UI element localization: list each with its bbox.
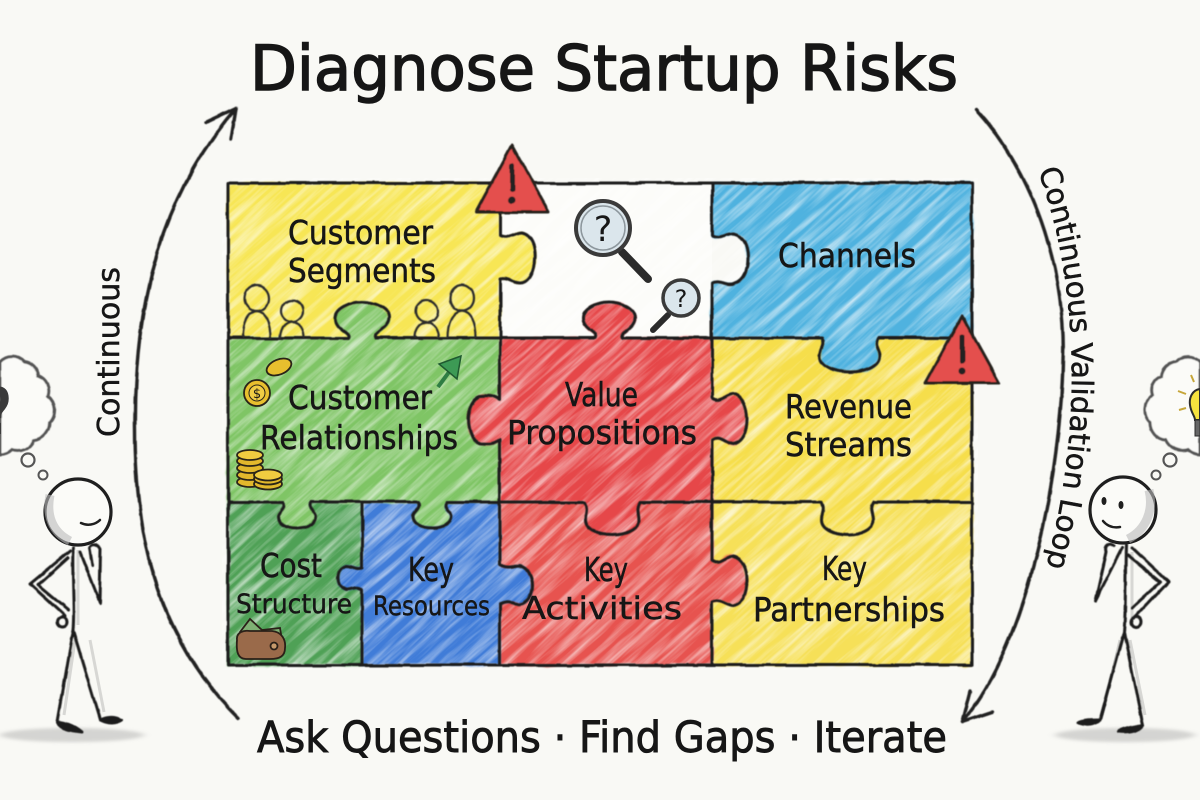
label: key partnerships: Key [822, 549, 867, 588]
panel: key resources fill [338, 502, 532, 665]
icon: left thinking figure [0, 479, 144, 742]
footer text: Ask Questions · Find Gaps · Iterate [257, 713, 947, 763]
icon: right thinking figure [1055, 477, 1195, 742]
label: key activities [522, 550, 682, 627]
panel: channels fill [712, 183, 972, 372]
label: continuous validation loop: Continuous Validation Loop [1040, 168, 1094, 568]
panel: key partnerships fill [712, 502, 972, 665]
label: customer segments: Segments [288, 251, 436, 290]
icon: warning triangle top [476, 145, 549, 212]
label: channels: Channels [778, 236, 916, 275]
title: Diagnose Startup Risks [250, 32, 958, 105]
panel: customer relationships fill [228, 302, 500, 528]
icon: large magnifier: ? [594, 210, 612, 250]
icon: large magnifier [576, 201, 648, 279]
label: customer relationships: Relationships [260, 418, 458, 457]
icon: growth arrow [438, 356, 461, 387]
icon: warning triangle right [925, 316, 999, 383]
label: cost structure: Structure [236, 589, 352, 620]
panel: customer segments fill [228, 183, 535, 338]
panel: key activities fill [500, 502, 747, 665]
label: key activities: Activities [522, 591, 682, 627]
panel: value propositions fill [468, 302, 747, 535]
label: value propositions: Propositions [507, 413, 697, 452]
arrow: left loop [135, 108, 238, 718]
label: continuous left: Continuous [92, 267, 127, 437]
label: key partnerships: Partnerships [753, 590, 945, 629]
label: customer relationships [260, 378, 458, 457]
panel: revenue streams fill [712, 338, 972, 535]
pencil texture [222, 178, 978, 670]
label: cost structure: Cost [260, 546, 322, 585]
icon: customer group [243, 285, 476, 338]
label: key resources [373, 550, 490, 622]
label: customer segments: Customer [288, 213, 433, 252]
icon: coins: $ [253, 387, 261, 402]
icon: right thought cloud with light bulb [1145, 357, 1200, 480]
icon: wallet [237, 619, 285, 659]
label: customer relationships: Customer [288, 378, 432, 417]
label: key resources: Key [408, 550, 454, 589]
icon: small magnifier: ? [675, 285, 687, 313]
label: key resources: Resources [373, 591, 490, 622]
arrow: right loop [962, 110, 1063, 722]
panel: empty missing piece [500, 183, 712, 338]
label: customer segments [288, 213, 436, 290]
label: key activities: Key [584, 550, 628, 589]
icon: coins [237, 355, 294, 490]
icon: left thought cloud [0, 357, 55, 480]
icon: small magnifier [653, 280, 699, 330]
label: revenue streams [785, 387, 912, 464]
label: value propositions [507, 375, 697, 452]
label: cost structure [236, 546, 352, 620]
label: value propositions: Value [565, 375, 638, 414]
label: revenue streams: Streams [785, 425, 912, 464]
label: revenue streams: Revenue [785, 387, 912, 426]
puzzle outlines [228, 183, 972, 665]
panel: cost structure fill [228, 502, 362, 665]
label: key partnerships [753, 549, 945, 629]
